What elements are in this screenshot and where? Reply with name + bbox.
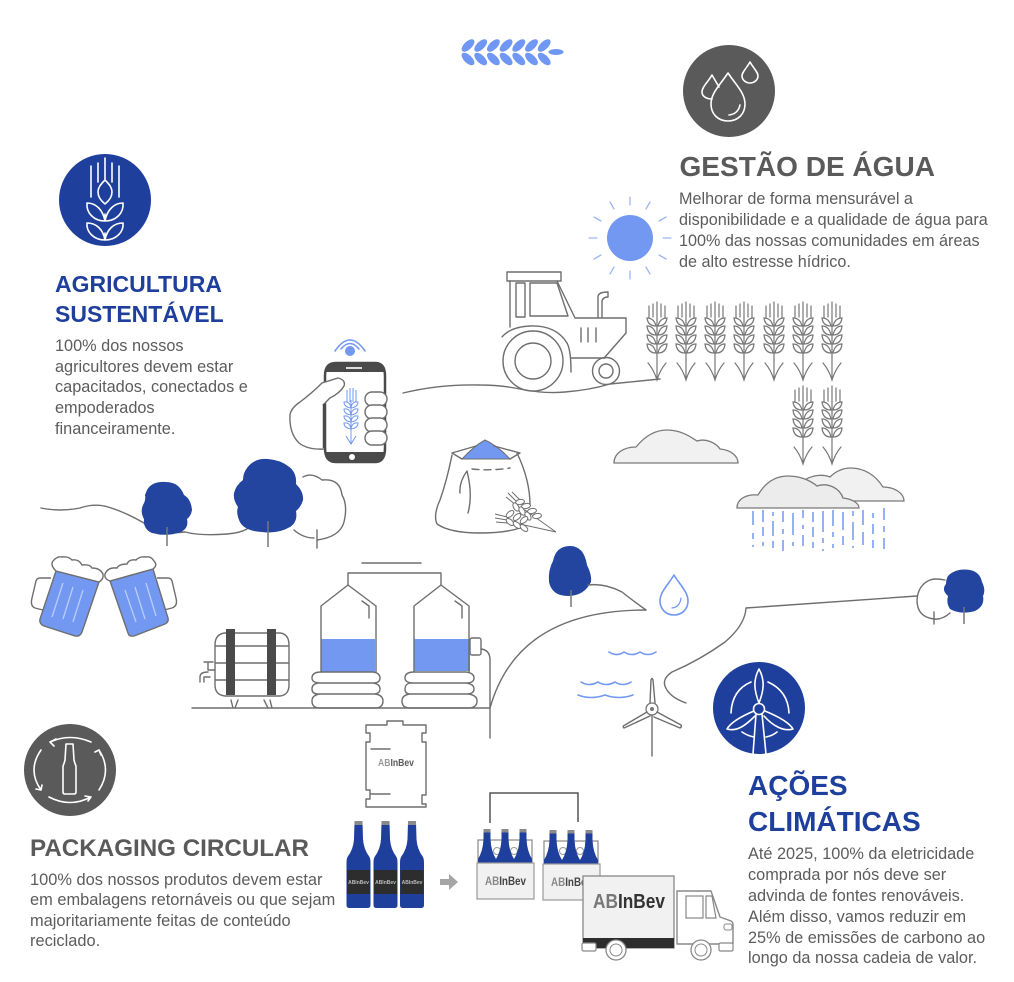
brand label: ABInBev [378, 758, 414, 769]
icon: six-pack two [543, 830, 600, 900]
icon: blue tree center [549, 546, 591, 607]
text: agriculture goal: 100% dos nossos [55, 337, 184, 355]
text: packaging goal: 100% dos nossos produtos devem estar [30, 871, 323, 889]
ground line: brewery floor [192, 707, 490, 709]
icon: beer mugs toasting [31, 557, 176, 636]
icon: water waves [578, 652, 656, 698]
left mug [31, 557, 103, 636]
right mug [105, 557, 176, 636]
phone [325, 363, 385, 462]
panel: sustainable agriculture [55, 154, 248, 438]
ground line: central curve [490, 610, 646, 708]
text: water goal: Melhorar de forma mensurável a [679, 190, 913, 208]
text: climate goal: comprada por nós deve ser [748, 866, 947, 884]
bottle labels [348, 880, 423, 886]
truck brand label: ABInBev [593, 891, 666, 913]
text: climate goal: advinda de fontes renováveis. [748, 887, 964, 905]
icon: delivery truck [582, 876, 733, 960]
icon: wheat sprig logo [459, 37, 564, 67]
rain [753, 508, 884, 551]
hill top line [588, 585, 646, 610]
icon: bottle with circular arrows [24, 724, 116, 816]
icon: outline tree [294, 475, 346, 548]
icon: fermentation tanks [312, 563, 490, 738]
text: water goal: de alto estresse hídrico. [679, 253, 851, 271]
text: climate goal: longo da nossa cadeia de valor. [748, 949, 977, 967]
icon: water drops [683, 45, 775, 137]
bracket: six-pack link [490, 793, 578, 823]
bottle labels: ABInBev [375, 880, 396, 886]
heading: Agricultura Sustentável: AGRICULTURA [55, 271, 222, 297]
icon: wheat ear [59, 154, 151, 246]
icon: blue tree small [142, 482, 192, 546]
wifi signal [335, 340, 365, 356]
wheat bundle [495, 492, 556, 533]
ground line: tractor hill [403, 379, 660, 393]
wheat on screen [344, 388, 358, 444]
icon: wind turbine [713, 662, 805, 754]
icon: six-pack two: ABInBev [551, 877, 593, 889]
right tank [402, 585, 477, 708]
heading: Gestão de Água: GESTÃO DE ÁGUA [680, 151, 935, 182]
icon: small cloud [614, 430, 738, 463]
panel: circular packaging [24, 724, 335, 950]
heading: Ações Climáticas: CLIMÁTICAS [748, 806, 921, 837]
icon: six-pack one: ABInBev [485, 876, 527, 888]
text: climate goal: Até 2025, 100% da eletricidade [748, 845, 974, 863]
front cloud [737, 476, 859, 508]
left tank [312, 585, 383, 708]
valve and pipe [470, 638, 481, 655]
icon: smartphone with hand [290, 340, 387, 462]
text: packaging goal: em embalagens retornáveis ou que sejam [30, 891, 335, 909]
icon: grain sack [436, 440, 556, 533]
icon: pallet box [366, 721, 426, 807]
text: agriculture goal: agricultores devem estar [55, 358, 234, 376]
icon: rain clouds [737, 468, 904, 551]
icon: blue tree right [944, 570, 984, 624]
icon: six-pack one [477, 829, 534, 899]
panel: climate action [713, 662, 985, 967]
text: water goal: 100% das nossas comunidades em áreas [679, 232, 980, 250]
text: packaging goal: reciclado. [30, 932, 100, 950]
ground line: left hills [41, 505, 247, 535]
text: water goal: disponibilidade e a qualidade de água para [679, 211, 988, 229]
back cloud [805, 468, 904, 501]
text: climate goal: 25% de emissões de carbono ao [748, 929, 985, 947]
heading: Ações Climáticas: AÇÕES [748, 770, 848, 801]
bottle labels: ABInBev [348, 880, 369, 886]
panel: water management [679, 45, 988, 271]
text: agriculture goal: empoderados [55, 399, 155, 417]
icon: blue tree large [234, 459, 303, 547]
ground line: right river [664, 596, 917, 703]
icon: bottles [346, 821, 424, 908]
text: climate goal: Além disso, vamos reduzir em [748, 908, 966, 926]
icon: wheat field [647, 302, 842, 464]
icon: tractor [502, 272, 626, 391]
icon: sun [589, 197, 671, 279]
heading: Agricultura Sustentável: SUSTENTÁVEL [55, 300, 224, 327]
bottle labels: ABInBev [402, 880, 423, 886]
heading: Packaging Circular: PACKAGING CIRCULAR [30, 835, 309, 862]
icon: wooden barrel [200, 629, 289, 708]
icon: outline tree right [917, 579, 950, 624]
text: agriculture goal: capacitados, conectados e [55, 378, 248, 396]
icon: water drop [660, 575, 688, 615]
text: packaging goal: majoritariamente feitas de conteúdo [30, 912, 291, 930]
icon: small wind turbine [623, 678, 681, 756]
hand [290, 378, 344, 449]
text: agriculture goal: financeiramente. [55, 420, 175, 438]
arrow: bottles to packs [440, 874, 458, 890]
